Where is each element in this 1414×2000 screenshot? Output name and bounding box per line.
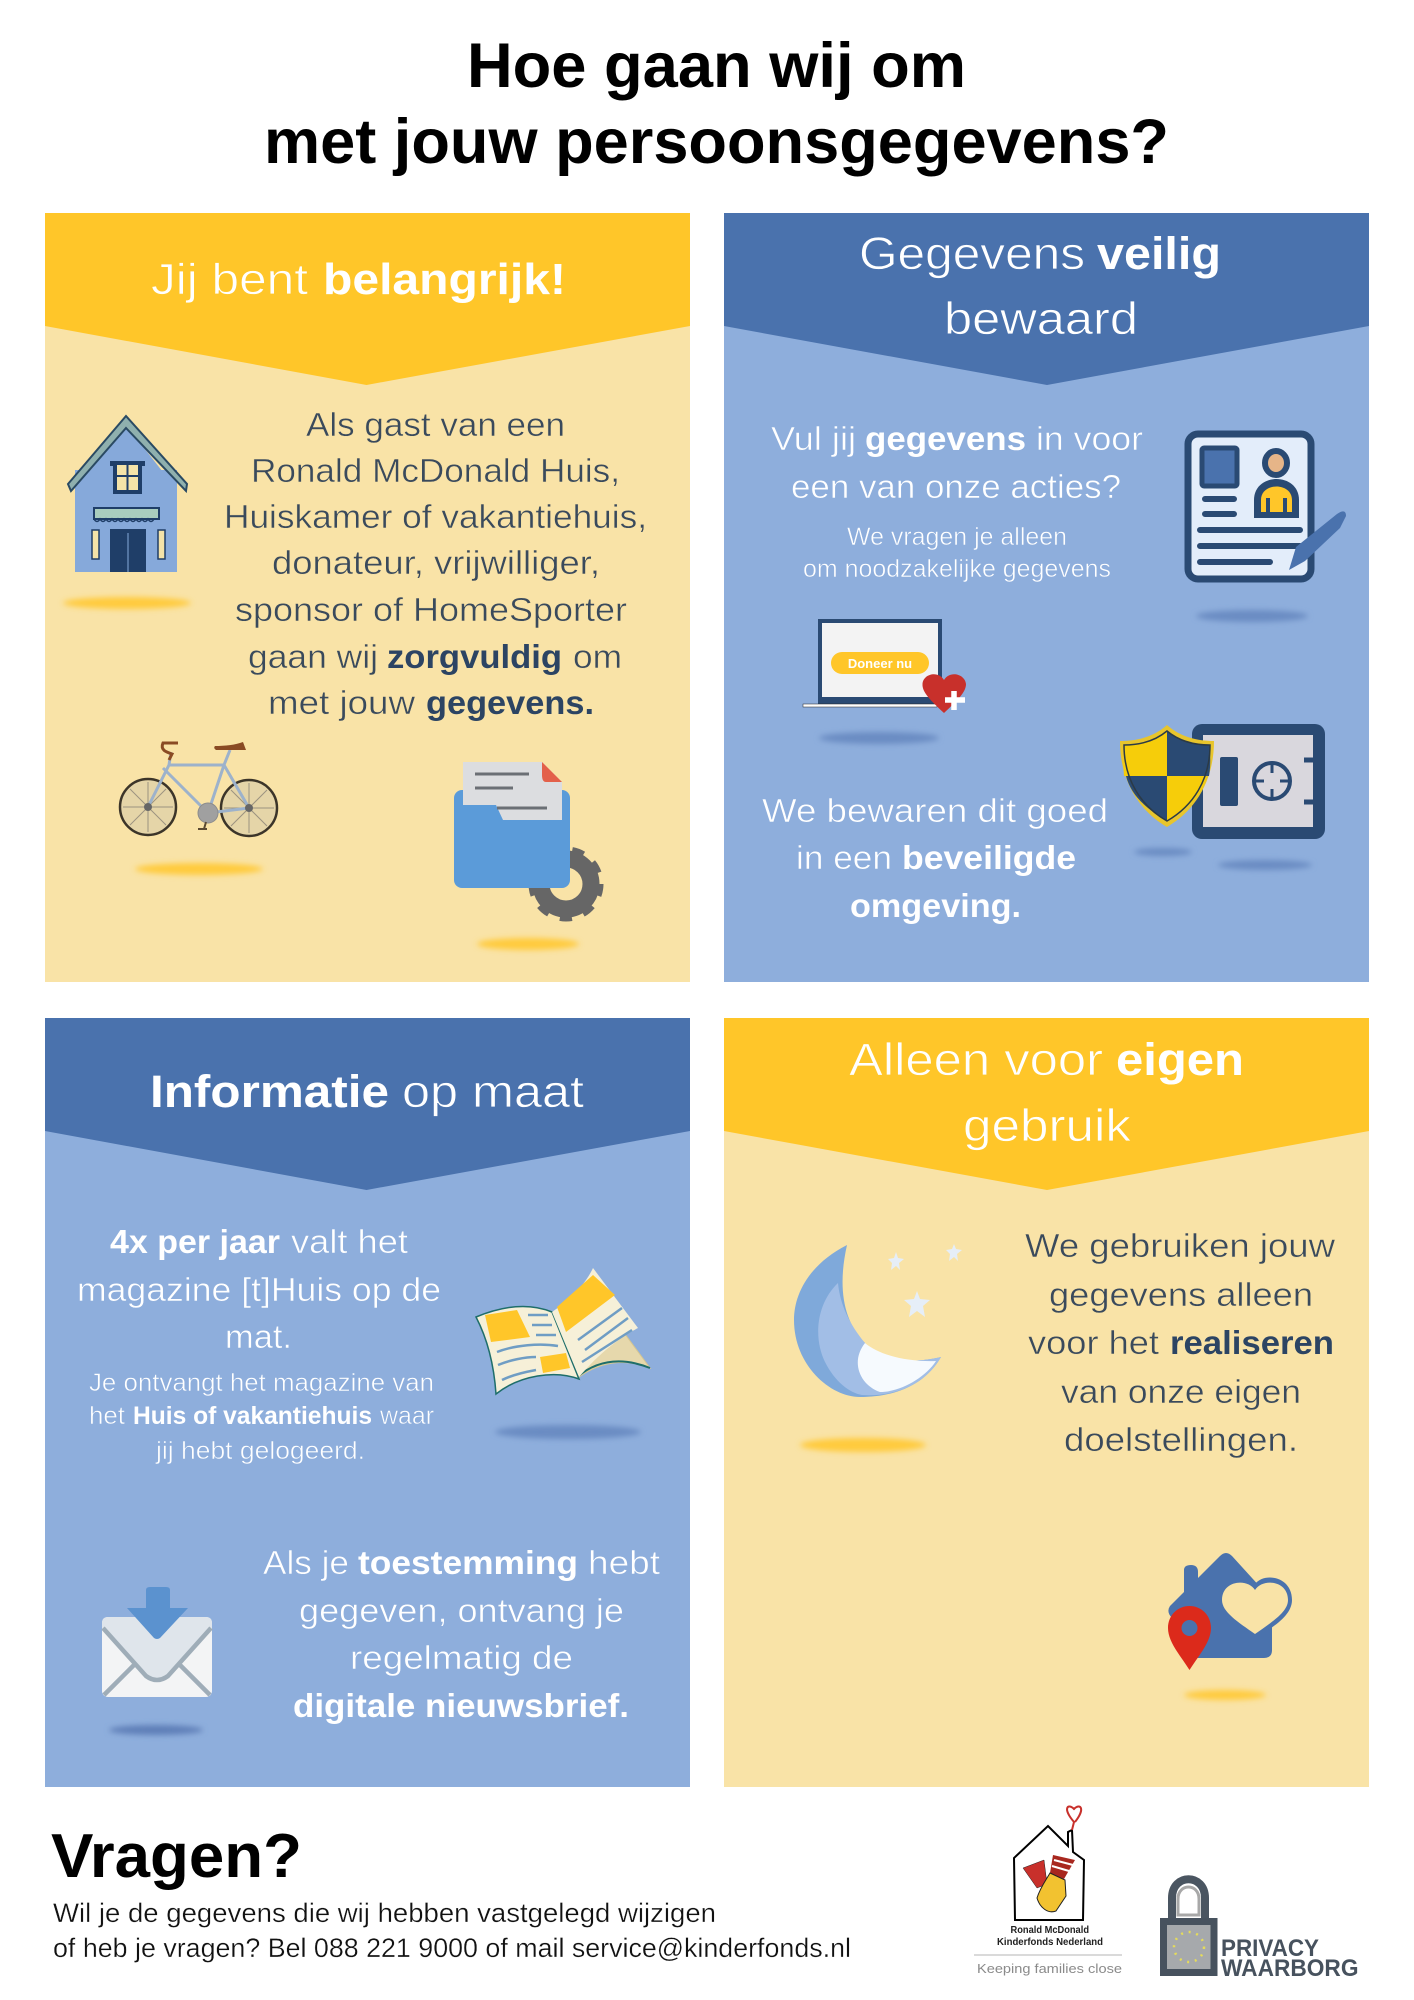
- logo: Ronald McDonald Kinderfonds: Keeping families close: [977, 1961, 1122, 1976]
- text: nieuwsbrief: toestemming: [358, 1544, 578, 1581]
- body text: voor het: [1028, 1324, 1159, 1361]
- panel heading: bewaard: [944, 293, 1138, 344]
- body text: donateur, vrijwilliger,: [272, 544, 600, 581]
- icon shadow: [135, 863, 263, 875]
- panel heading: belangrijk!: [323, 255, 566, 304]
- icon: envelope with arrow: [102, 1587, 212, 1697]
- text: beveiligde omgeving: beveiligde: [902, 839, 1076, 876]
- logo: Privacy Waarborg: [1160, 1879, 1358, 1982]
- body text: Ronald McDonald Huis,: [251, 452, 620, 489]
- panel heading: Alleen voor: [849, 1034, 1103, 1085]
- body text: gegevens.: [426, 684, 594, 721]
- body text: [1025, 1227, 1335, 1458]
- icon: folder with document and gear: [454, 762, 600, 918]
- icon shadow: [109, 1725, 203, 1735]
- icon shadow: [1134, 848, 1192, 856]
- body text: zorgvuldig: [387, 638, 562, 675]
- icon: moon and stars: [794, 1244, 962, 1397]
- title: [264, 31, 1169, 177]
- logo: Ronald McDonald Kinderfonds: Kinderfonds Nederland: [997, 1937, 1103, 1948]
- panel heading: [150, 1066, 585, 1117]
- icon: shield: [1120, 725, 1214, 827]
- title: Hoe gaan wij om: [467, 31, 966, 101]
- panel heading: [151, 255, 566, 304]
- logo: Privacy Waarborg: PRIVACY: [1221, 1935, 1319, 1962]
- contact text: of heb je vragen? Bel 088 221 9000 of mail service@kinderfonds.nl: [53, 1933, 851, 1963]
- text: magazine: jij hebt gelogeerd.: [155, 1437, 365, 1465]
- contact text: Wil je de gegevens die wij hebben vastgelegd wijzigen: [53, 1898, 716, 1928]
- text: beveiligde omgeving: in een: [796, 839, 892, 876]
- text: magazine: 4x per jaar: [110, 1223, 280, 1260]
- text: nieuwsbrief: [263, 1544, 660, 1724]
- panel: Informatie op maat: [45, 1018, 690, 1787]
- panel: Jij bent belangrijk: [45, 213, 690, 982]
- panel heading: veilig: [1097, 228, 1221, 279]
- text: nieuwsbrief: hebt: [588, 1544, 660, 1581]
- icon: safe: [1192, 724, 1325, 839]
- panel heading: [859, 228, 1221, 344]
- body text: realiseren: [1170, 1324, 1334, 1361]
- icon shadow: [495, 1425, 641, 1439]
- heading: Vragen: Vragen?: [51, 1822, 302, 1891]
- icon: magazine: [476, 1268, 650, 1394]
- panel heading: [849, 1034, 1244, 1151]
- body text: doelstellingen.: [1064, 1421, 1298, 1458]
- body text: met jouw: [268, 684, 415, 721]
- panel: Alleen voor eigen gebruik: [724, 1018, 1369, 1787]
- icon shadow: [1218, 860, 1312, 870]
- body text: gaan wij: [248, 638, 378, 675]
- icon: form with pen: [1188, 434, 1346, 579]
- text: magazine: valt het: [291, 1223, 408, 1260]
- logo: Privacy Waarborg: WAARBORG: [1221, 1955, 1358, 1982]
- text: magazine: magazine [t]Huis op de: [77, 1271, 441, 1308]
- icon shadow: [63, 597, 191, 609]
- text: magazine: waar: [379, 1402, 434, 1430]
- logo: Ronald McDonald Kinderfonds: Ronald McDonald: [1010, 1925, 1089, 1936]
- panel: Gegevens veilig bewaard: [724, 213, 1369, 982]
- text: gegevens invullen: in voor: [1036, 420, 1143, 457]
- text: nieuwsbrief: Als je: [263, 1544, 349, 1581]
- body text: gegevens alleen: [1049, 1276, 1313, 1313]
- body text: Huiskamer of vakantiehuis,: [224, 498, 647, 535]
- icon shadow: [1196, 610, 1308, 622]
- body text: Als gast van een: [306, 406, 565, 443]
- logo: Ronald McDonald Kinderfonds: [974, 1807, 1122, 1976]
- text: gegevens invullen: [771, 420, 1143, 583]
- text: magazine: Je ontvangt het magazine van: [89, 1369, 434, 1397]
- body text: van onze eigen: [1061, 1373, 1301, 1410]
- text: gegevens invullen: Vul jij: [771, 420, 856, 457]
- icon: house with heart and location pin: [1168, 1553, 1292, 1670]
- text: magazine: [77, 1223, 441, 1465]
- panel heading: Gegevens: [859, 228, 1085, 279]
- title: met jouw persoonsgegevens?: [264, 107, 1169, 177]
- panel header banner: [724, 213, 1369, 385]
- text: beveiligde omgeving: We bewaren dit goed: [762, 792, 1108, 829]
- contact text: [53, 1898, 851, 1963]
- text: beveiligde omgeving: omgeving.: [850, 887, 1021, 924]
- icon: laptop with donate button: [803, 621, 966, 713]
- icon: house: [68, 416, 187, 572]
- panel heading: eigen: [1116, 1034, 1244, 1085]
- icon: bicycle: [120, 742, 277, 836]
- text: magazine: Huis of vakantiehuis: [133, 1402, 372, 1430]
- icon shadow: [800, 1438, 926, 1452]
- text: nieuwsbrief: digitale nieuwsbrief.: [293, 1687, 629, 1724]
- body text: [224, 406, 647, 721]
- panel heading: op maat: [402, 1066, 585, 1117]
- body text: sponsor of HomeSporter: [235, 591, 627, 628]
- body text: om: [573, 638, 622, 675]
- panel heading: Informatie: [150, 1066, 389, 1117]
- body text: We gebruiken jouw: [1025, 1227, 1335, 1264]
- panel heading: gebruik: [963, 1100, 1132, 1151]
- icon shadow: [1184, 1690, 1266, 1700]
- panel header banner: [724, 1018, 1369, 1190]
- text: magazine: mat.: [225, 1318, 292, 1355]
- panel heading: Jij bent: [151, 255, 308, 304]
- text: gegevens invullen: een van onze acties?: [791, 468, 1121, 505]
- text: gegevens invullen: om noodzakelijke gegevens: [803, 555, 1111, 583]
- icon shadow: [477, 938, 579, 950]
- text: nieuwsbrief: gegeven, ontvang je: [299, 1592, 624, 1629]
- text: nieuwsbrief: regelmatig de: [350, 1639, 573, 1676]
- icon: laptop with donate button: Doneer nu: [848, 656, 912, 671]
- text: gegevens invullen: gegevens: [865, 420, 1026, 457]
- panel header banner: [45, 1018, 690, 1190]
- text: gegevens invullen: We vragen je alleen: [847, 523, 1067, 551]
- icon shadow: [819, 732, 939, 744]
- text: beveiligde omgeving: [762, 792, 1108, 924]
- panel header banner: [45, 213, 690, 385]
- text: magazine: het: [89, 1402, 125, 1430]
